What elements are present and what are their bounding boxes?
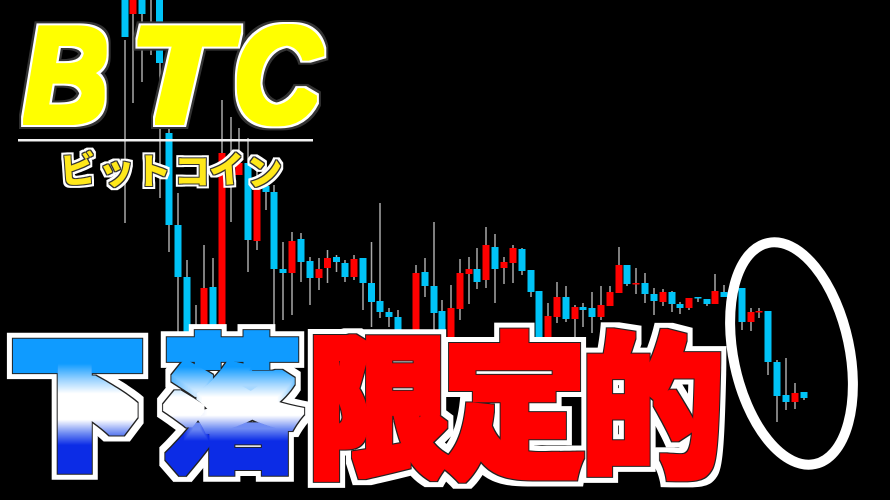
title: BTC bbox=[24, 0, 322, 151]
title: BTC: C bbox=[234, 0, 322, 151]
divider under BTC bbox=[18, 139, 313, 142]
headline: 限定的 bbox=[307, 324, 724, 497]
headline: 限定的: 的 bbox=[581, 324, 724, 497]
rising candles bbox=[130, 0, 798, 402]
headline: 限定的: 限 bbox=[307, 324, 450, 497]
candlestick chart bbox=[122, 0, 808, 422]
highlight ellipse around the final drop bbox=[711, 231, 872, 476]
title: BTC: B bbox=[24, 0, 108, 151]
falling candles bbox=[122, 0, 808, 402]
headline: 落: 落 bbox=[163, 327, 302, 491]
subtitle: ビットコイン: ビットコイン bbox=[59, 148, 285, 194]
candle wicks bbox=[125, 0, 804, 422]
title: BTC: T bbox=[129, 0, 239, 151]
headline: 下: 下 bbox=[13, 329, 142, 484]
headline: 限定的: 定 bbox=[443, 324, 586, 497]
